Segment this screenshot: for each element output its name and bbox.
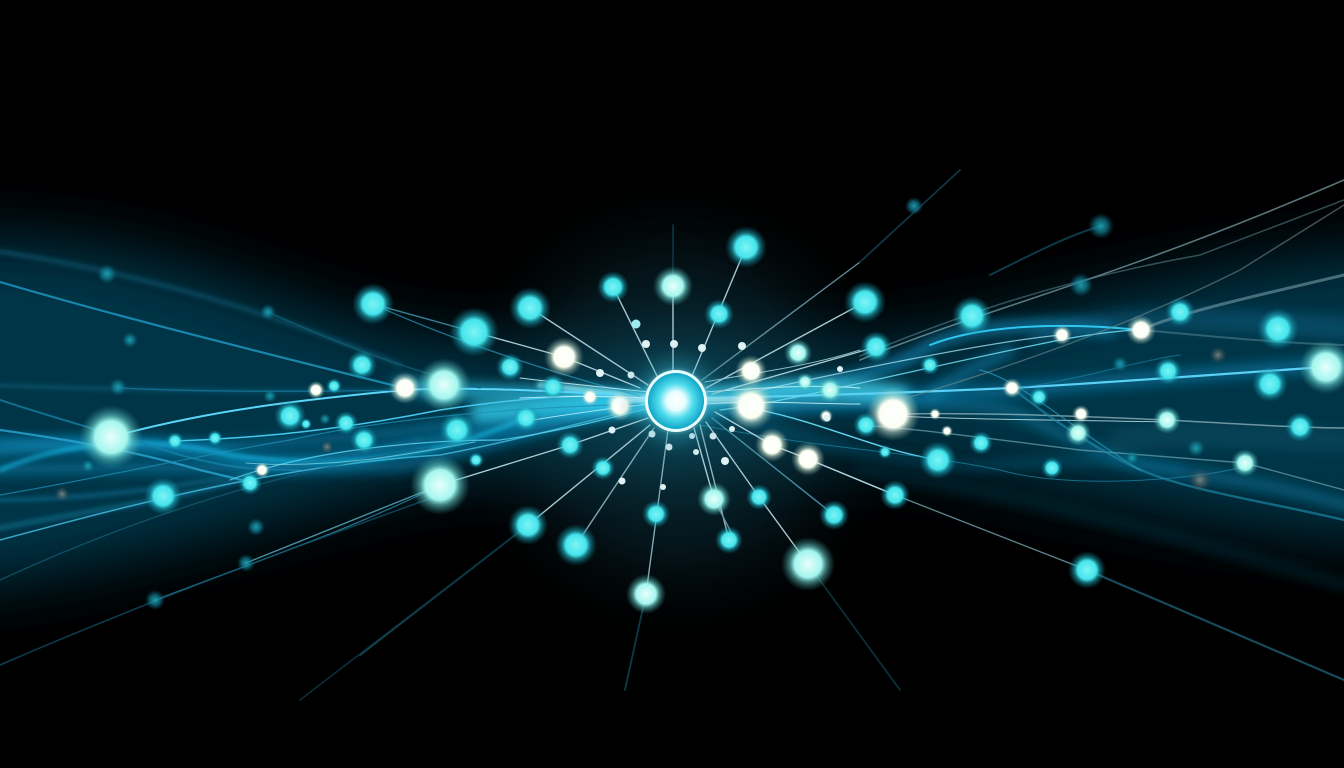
radial spokes from hub to outer nodes bbox=[246, 170, 960, 700]
central hub bbox=[610, 343, 742, 459]
soft light streams: right bbox=[700, 319, 1344, 590]
sharp light strands: right bbox=[700, 180, 1344, 680]
sharp light strands: left bbox=[0, 282, 650, 665]
outer glowing nodes bbox=[54, 197, 1344, 614]
small relay dots on spokes bbox=[596, 320, 843, 490]
background: dark teal haze bbox=[0, 180, 1344, 640]
soft light streams: left bbox=[0, 250, 650, 530]
